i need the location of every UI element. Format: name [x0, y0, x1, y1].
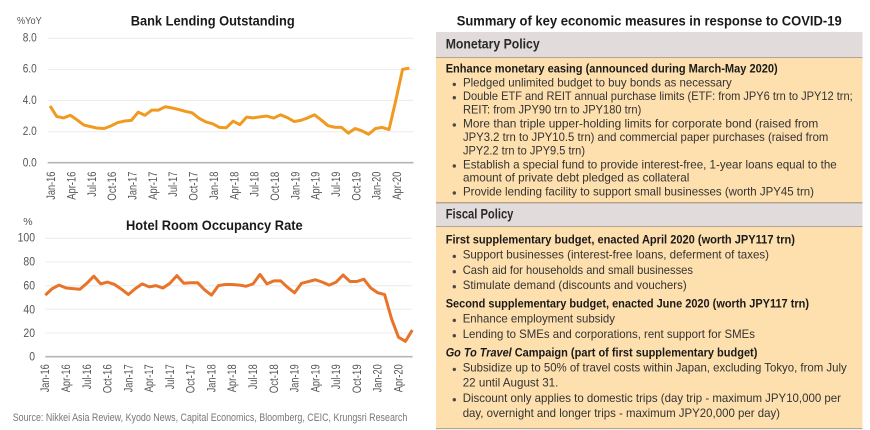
go to travel campaign: Go To Travel — [446, 346, 512, 360]
x axis labels: Jul-18 — [248, 364, 260, 389]
second supplementary budget: Second supplementary budget, enacted June 2020 (worth JPY117 trn) — [446, 297, 809, 311]
x axis labels: Jan-18 — [206, 364, 218, 392]
grid lines and axis — [48, 38, 413, 163]
x axis labels: Apr-19 — [310, 364, 322, 392]
x axis labels — [40, 364, 405, 393]
x axis labels: Jul-16 — [87, 172, 99, 197]
section body: monetary easing: Pledged unlimited budget to buy bonds as necessary — [463, 76, 732, 90]
x axis labels: Apr-16 — [61, 364, 73, 392]
x axis labels: Oct-17 — [189, 172, 201, 201]
chart title: Hotel Room Occupancy Rate — [126, 217, 303, 233]
x axis labels: Jan-19 — [290, 364, 302, 392]
source note: Source: Nikkei Asia Review, Kyodo News, Capital Economics, Bloomberg, CEIC, Krungsri Research — [13, 412, 407, 424]
chart title: Bank Lending Outstanding — [131, 12, 295, 28]
grid lines and axis — [45, 238, 413, 357]
second supplementary budget: Lending to SMEs and corporations, rent support for SMEs — [463, 327, 755, 341]
y axis labels: 20 — [23, 328, 35, 340]
section header: fiscal policy: Fiscal Policy — [446, 206, 514, 222]
y axis labels: 4.0 — [23, 95, 37, 107]
x axis labels: Oct-16 — [102, 364, 114, 393]
section body: monetary easing: More than triple upper-holding limits for corporate bond (raised from — [463, 116, 818, 130]
panel: fiscal policy — [436, 202, 862, 429]
x axis labels: Apr-20 — [392, 172, 404, 200]
section header: fiscal policy — [436, 202, 862, 227]
section body: monetary easing: Enhance monetary easing (announced during March-May 2020) — [446, 62, 778, 76]
x axis labels: Jan-17 — [123, 364, 135, 392]
x axis labels: Apr-18 — [229, 172, 241, 200]
y axis labels: 40 — [23, 304, 35, 316]
go to travel campaign: day, overnight and longer trips - maximum JPY20,000 per day) — [463, 406, 780, 420]
y axis labels: 60 — [23, 280, 35, 292]
y axis labels: 80 — [23, 257, 35, 269]
unit label: %YoY — [17, 15, 42, 27]
first supplementary budget — [446, 233, 795, 292]
second supplementary budget: Enhance employment subsidy — [463, 312, 615, 326]
y axis labels — [23, 33, 37, 169]
first supplementary budget: Support businesses (interest-free loans, deferment of taxes) — [463, 248, 769, 262]
y axis labels: 8.0 — [23, 33, 37, 45]
first supplementary budget: First supplementary budget, enacted April 2020 (worth JPY117 trn) — [446, 233, 795, 247]
y axis labels: 0.0 — [23, 157, 37, 169]
x axis labels: Jul-17 — [165, 364, 177, 389]
go to travel campaign: Subsidize up to 50% of travel costs within Japan, excluding Tokyo, from July — [463, 361, 847, 375]
x axis labels — [46, 172, 404, 201]
chart: hotel room occupancy rate — [18, 216, 412, 393]
x axis labels: Oct-18 — [270, 172, 282, 201]
section body: monetary easing: JPY3.2 trn to JPY10.5 trn) and commercial paper purchases (raised from — [463, 130, 828, 144]
x axis labels: Jan-20 — [372, 172, 384, 200]
section body: monetary easing — [436, 58, 862, 202]
x axis labels: Apr-18 — [227, 364, 239, 392]
x axis labels: Oct-19 — [352, 364, 364, 393]
x axis labels: Oct-19 — [351, 172, 363, 201]
x axis labels: Jan-18 — [209, 172, 221, 200]
y axis labels: 6.0 — [23, 64, 37, 76]
x axis labels: Jul-18 — [250, 172, 262, 197]
x axis labels: Jul-17 — [168, 172, 180, 197]
chart: bank lending outstanding — [17, 12, 414, 201]
x axis labels: Jan-16 — [40, 364, 52, 392]
data line: lending growth — [50, 68, 409, 134]
go to travel campaign: Campaign (part of first supplementary budget) — [515, 346, 757, 360]
x axis labels: Oct-17 — [186, 364, 198, 393]
x axis labels: Jan-20 — [373, 364, 385, 392]
y axis labels: 2.0 — [23, 126, 37, 138]
y axis labels: 100 — [18, 233, 35, 245]
unit label: % — [23, 216, 33, 228]
section body: fiscal measures — [436, 227, 862, 429]
x axis labels: Apr-16 — [66, 172, 78, 200]
x axis labels: Apr-19 — [311, 172, 323, 200]
summary heading: Summary of key economic measures in response to COVID-19 — [457, 12, 842, 28]
x axis labels: Apr-20 — [394, 364, 406, 392]
panel: monetary policy — [436, 32, 862, 202]
go to travel campaign: 22 until August 31. — [463, 376, 558, 390]
data line: occupancy rate — [45, 274, 412, 341]
section body: monetary easing: Provide lending facility to support small businesses (worth JPY45 trn) — [463, 184, 814, 198]
x axis labels: Jul-19 — [331, 364, 343, 389]
section header: monetary policy — [436, 32, 862, 58]
section body: monetary easing: JPY2.2 trn to JPY9.5 trn) — [463, 143, 585, 157]
first supplementary budget: Stimulate demand (discounts and vouchers) — [463, 278, 687, 292]
section body: monetary easing: REIT: from JPY90 trn to JPY180 trn) — [463, 102, 641, 116]
section body: monetary easing: amount of private debt pledged as collateral — [463, 171, 689, 185]
y axis labels: 0 — [29, 351, 35, 363]
x axis labels: Jan-16 — [46, 172, 58, 200]
x axis labels: Jul-19 — [331, 172, 343, 197]
go to travel campaign — [446, 346, 847, 420]
x axis labels: Apr-17 — [144, 364, 156, 392]
x axis labels: Jan-19 — [290, 172, 302, 200]
x axis labels: Oct-18 — [269, 364, 281, 393]
x axis labels: Jan-17 — [128, 172, 140, 200]
x axis labels: Oct-16 — [107, 172, 119, 201]
x axis labels: Jul-16 — [82, 364, 94, 389]
y axis labels — [18, 233, 35, 363]
section header: monetary policy: Monetary Policy — [446, 36, 540, 52]
first supplementary budget: Cash aid for households and small businesses — [463, 263, 693, 277]
section body: monetary easing: Establish a special fund to provide interest-free, 1-year loans equal to the — [463, 157, 837, 171]
x axis labels: Apr-17 — [148, 172, 160, 200]
go to travel campaign: Discount only applies to domestic trips (day trip - maximum JPY10,000 per — [463, 391, 841, 405]
second supplementary budget — [446, 297, 809, 341]
